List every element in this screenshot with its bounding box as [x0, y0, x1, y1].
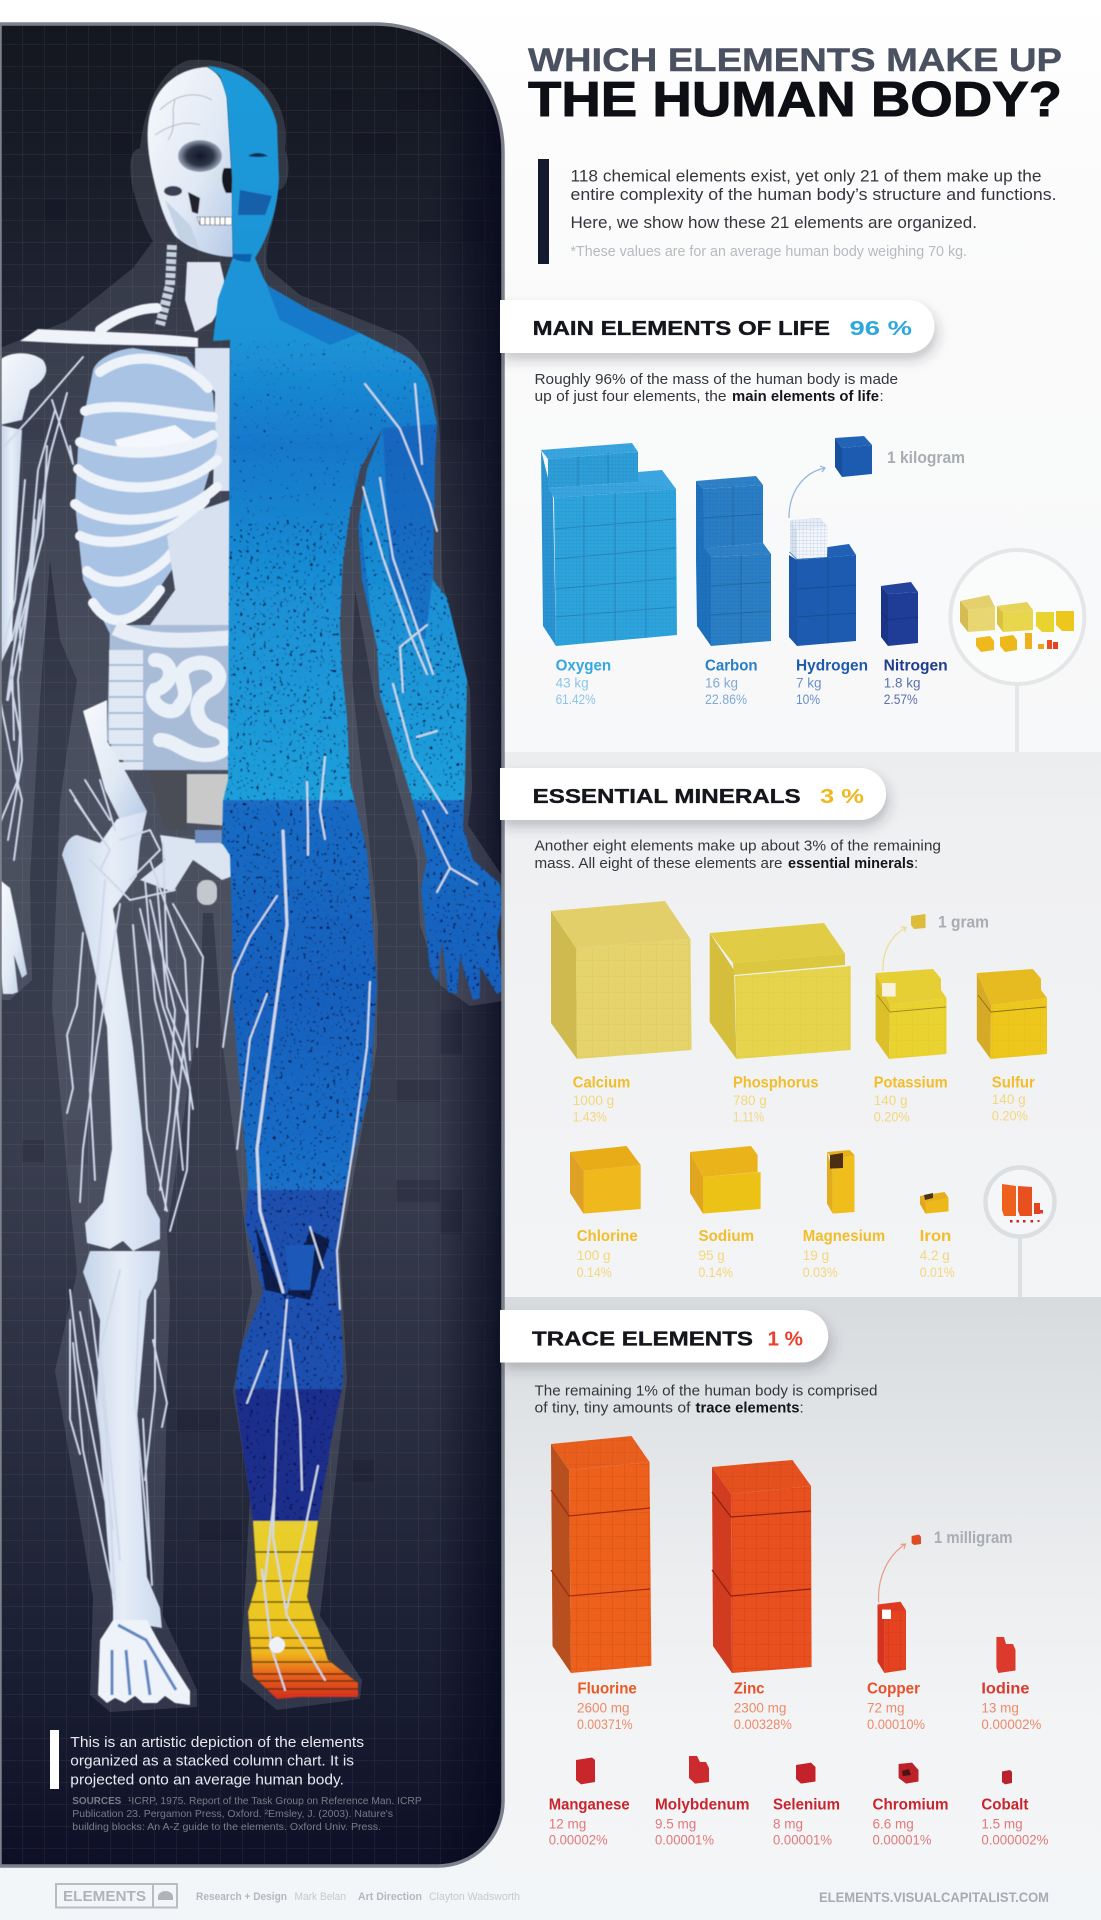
cube: manganese [576, 1758, 595, 1784]
panel: trace elements [500, 1310, 1048, 1848]
labels: essential minerals: 0.14% [577, 1265, 612, 1280]
description [534, 838, 941, 872]
labels: trace elements: 0.00002% [981, 1717, 1041, 1732]
femur [62, 811, 160, 1251]
left arm bones [0, 353, 83, 994]
intro text block: *These values are for an average human body weighing 70 kg. [570, 244, 967, 260]
labels: essential minerals: Magnesium [803, 1228, 885, 1245]
labels: essential minerals: 19 g [803, 1248, 829, 1263]
labels: trace elements: 2600 mg [577, 1700, 630, 1715]
labels: trace elements: 13 mg [981, 1700, 1019, 1715]
pelvis [83, 700, 233, 905]
foot bones [98, 1620, 190, 1705]
intro text block: 118 chemical elements exist, yet only 21 of them make up the [570, 167, 1042, 186]
skeleton half [0, 67, 233, 1705]
labels: essential minerals: Potassium [874, 1074, 948, 1092]
cube: sodium [690, 1146, 761, 1214]
arrow: potassium to gram [883, 927, 906, 971]
credits: Art Direction [358, 1891, 422, 1903]
sources: Publication 23. Pergamon Press, Oxford. ²Emsley, J. (2003). Nature's [72, 1808, 393, 1820]
arrow: hydrogen to kilogram [789, 466, 825, 518]
labels: main elements: 1.8 kg [884, 676, 920, 691]
logo: elements: ELEMENTS [63, 1889, 146, 1905]
heading: trace elements 1%: TRACE ELEMENTS [532, 1328, 753, 1350]
heading: trace elements 1%: 1 % [768, 1328, 803, 1350]
description: mass. All eight of these elements are [534, 855, 782, 872]
labels: trace elements: Fluorine [577, 1680, 637, 1697]
labels: trace elements: 0.00328% [734, 1717, 792, 1732]
cube: cobalt [1002, 1770, 1012, 1784]
cube: hydrogen with one kilogram highlighted [789, 518, 856, 646]
title [528, 42, 1062, 127]
body silhouette halo [0, 60, 510, 1712]
labels: trace elements: Iodine [981, 1680, 1030, 1697]
labels: essential minerals: 4.2 g [920, 1248, 950, 1263]
intro text block: Here, we show how these 21 elements are organized. [570, 213, 977, 232]
heading: main elements of life 96%: MAIN ELEMENTS OF LIFE [533, 318, 830, 340]
callout: artistic depiction note: projected onto an average human body. [70, 1771, 344, 1788]
labels: trace elements: 1.5 mg [981, 1817, 1023, 1832]
panel: essential minerals [500, 768, 1054, 1297]
labels: trace elements: 0.000002% [981, 1832, 1048, 1848]
scale: one gram cube: 1 gram [938, 914, 989, 932]
description: : [880, 388, 884, 405]
labels: trace elements: 12 mg [549, 1817, 586, 1832]
intro text block [538, 159, 1056, 264]
labels: essential minerals: 1.11% [733, 1109, 764, 1124]
intro text block: entire complexity of the human body’s structure and functions. [570, 185, 1056, 204]
description: Roughly 96% of the mass of the human body is made [534, 371, 898, 388]
description: : [914, 855, 918, 872]
panel: human body stacked column illustration [0, 24, 510, 1866]
cube: molybdenum [689, 1756, 709, 1784]
labels: main elements: 7 kg [796, 676, 822, 691]
credits: Research + Design [196, 1891, 287, 1903]
title: THE HUMAN BODY? [528, 73, 1062, 127]
title: WHICH ELEMENTS MAKE UP [528, 42, 1062, 78]
website: ELEMENTS.VISUALCAPITALIST.COM [819, 1889, 1049, 1905]
footer [56, 1884, 1049, 1908]
labels: main elements: 2.57% [884, 692, 918, 707]
scale: one kilogram cube: 1 kilogram [887, 449, 965, 467]
labels: essential minerals: 100 g [577, 1248, 610, 1263]
labels: essential minerals: 1000 g [573, 1093, 614, 1108]
band: nitrogen [234, 1388, 342, 1522]
labels: essential minerals: 0.20% [992, 1108, 1028, 1123]
scale: one kilogram cube [835, 436, 965, 477]
description: Another eight elements make up about 3% of the remaining [534, 838, 941, 855]
labels: main elements: 22.86% [705, 692, 747, 707]
labels: trace elements: 6.6 mg [872, 1817, 914, 1832]
description: of tiny, tiny amounts of [534, 1400, 691, 1417]
band: minerals and trace elements [247, 1520, 359, 1700]
labels: trace elements: 0.00010% [867, 1717, 925, 1732]
labels: trace elements: 0.00001% [872, 1832, 932, 1848]
sources: SOURCES [72, 1795, 121, 1807]
labels: essential minerals: 780 g [733, 1093, 767, 1108]
arrow: copper to milligram [879, 1544, 906, 1602]
sources: building blocks: An A-Z guide to the elements. Oxford Univ. Press. [72, 1821, 381, 1833]
sources: ¹ICRP, 1975. Report of the Task Group on Reference Man. ICRP [128, 1795, 422, 1807]
labels: essential minerals: 1.43% [573, 1109, 607, 1124]
labels: essential minerals: 0.03% [803, 1265, 838, 1280]
muscle half, coloured by element bands [200, 60, 510, 1701]
neck and clavicle [20, 245, 230, 491]
labels: main elements: 61.42% [556, 692, 596, 707]
cube: copper with one milligram highlighted [878, 1602, 906, 1673]
heading: trace elements 1% [500, 1310, 828, 1362]
cube: iodine [996, 1637, 1016, 1673]
labels: essential minerals: Sodium [698, 1228, 754, 1245]
labels: essential minerals: 0.01% [920, 1265, 955, 1280]
cube: iron [920, 1192, 948, 1214]
magnifier: trace elements to scale [986, 1168, 1054, 1297]
description: up of just four elements, the [534, 388, 726, 405]
labels: trace elements: 72 mg [867, 1700, 905, 1715]
labels: trace elements: 2300 mg [734, 1700, 786, 1715]
heading: essential minerals 3%: ESSENTIAL MINERALS [533, 786, 801, 808]
cube: magnesium [827, 1150, 854, 1214]
cube: phosphorus [710, 923, 851, 1059]
labels: main elements: Hydrogen [796, 658, 868, 675]
labels: main elements [556, 658, 948, 707]
heading: essential minerals 3% [500, 768, 886, 820]
ribcage [75, 348, 217, 634]
cube: potassium with one gram highlighted [876, 969, 946, 1059]
band: hydrogen [234, 1190, 346, 1390]
labels: main elements: Oxygen [556, 658, 611, 675]
description [534, 1383, 878, 1417]
heading: main elements of life 96%: 96 % [850, 318, 912, 340]
labels: trace elements: Selenium [773, 1796, 840, 1813]
description: trace elements [696, 1400, 800, 1417]
callout: artistic depiction note: organized as a stacked column chart. It is [70, 1752, 354, 1769]
labels: essential minerals: Iron [920, 1228, 951, 1245]
description: essential minerals [788, 855, 914, 872]
labels: essential minerals: 140 g [992, 1092, 1026, 1107]
labels: trace elements: Cobalt [981, 1796, 1028, 1813]
labels: essential minerals: Chlorine [577, 1228, 638, 1245]
labels: essential minerals: Phosphorus [733, 1074, 818, 1092]
credits: Clayton Wadsworth [429, 1891, 520, 1903]
credits [196, 1891, 520, 1903]
labels: essential minerals: 140 g [874, 1093, 907, 1108]
labels: essential minerals: Calcium [573, 1074, 630, 1092]
labels: trace elements: Manganese [549, 1796, 630, 1813]
labels: main elements: 43 kg [556, 676, 589, 691]
labels: main elements: 16 kg [705, 676, 738, 691]
labels: essential minerals: 0.14% [698, 1265, 733, 1280]
cube: zinc [712, 1460, 812, 1673]
tibia [83, 1251, 162, 1628]
labels: main elements: Nitrogen [884, 658, 948, 675]
labels: essential minerals [573, 1074, 1035, 1280]
labels: main elements: 10% [796, 692, 820, 707]
labels: trace elements [549, 1680, 1048, 1848]
labels: trace elements: Copper [867, 1680, 920, 1697]
panel: main elements of life [500, 300, 1084, 752]
band: carbon [200, 800, 510, 1190]
labels: trace elements: 8 mg [773, 1817, 803, 1832]
nerves on muscle arm and leg [223, 384, 477, 1690]
labels: essential minerals: 95 g [698, 1248, 725, 1263]
cube: fluorine [551, 1436, 651, 1673]
band: oxygen [207, 65, 468, 801]
labels: essential minerals: Sulfur [992, 1074, 1035, 1092]
abdominal organs [150, 500, 230, 625]
labels: trace elements: Zinc [734, 1680, 765, 1697]
callout: artistic depiction note [50, 1730, 364, 1789]
description [534, 371, 898, 405]
skull [148, 67, 233, 257]
logo: elements [56, 1884, 177, 1908]
heading: main elements of life 96% [500, 300, 935, 353]
cube: oxygen [541, 443, 677, 646]
callout: artistic depiction note: This is an artistic depiction of the elements [70, 1734, 364, 1751]
labels: essential minerals: 0.20% [874, 1109, 910, 1124]
cube: chromium [899, 1763, 918, 1784]
intestines [107, 625, 230, 770]
description: : [800, 1400, 804, 1417]
cube: chlorine [570, 1146, 641, 1214]
labels: trace elements: Molybdenum [655, 1796, 750, 1813]
labels: trace elements: Chromium [872, 1796, 948, 1813]
labels: trace elements: 0.00001% [773, 1832, 832, 1848]
cube: calcium [551, 901, 692, 1059]
cube: nitrogen [881, 582, 918, 646]
scale: one gram cube [911, 914, 989, 932]
nerves on skeleton leg [67, 780, 203, 1600]
labels: trace elements: 0.00002% [549, 1832, 608, 1848]
cube: carbon [696, 476, 771, 646]
labels: main elements: Carbon [705, 658, 758, 675]
cube: sulfur [977, 969, 1047, 1059]
description: main elements of life [732, 388, 879, 405]
scale: one milligram cube: 1 milligram [934, 1529, 1012, 1547]
heading: essential minerals 3%: 3 % [820, 786, 864, 808]
credits: Mark Belan [294, 1891, 346, 1903]
labels: trace elements: 0.00001% [655, 1832, 714, 1848]
sources [72, 1795, 422, 1833]
labels: trace elements: 0.00371% [577, 1717, 633, 1732]
magnifier: essential minerals to scale [950, 550, 1084, 752]
description: The remaining 1% of the human body is comprised [534, 1383, 878, 1400]
cube: selenium [796, 1763, 816, 1784]
labels: trace elements: 9.5 mg [655, 1817, 696, 1832]
